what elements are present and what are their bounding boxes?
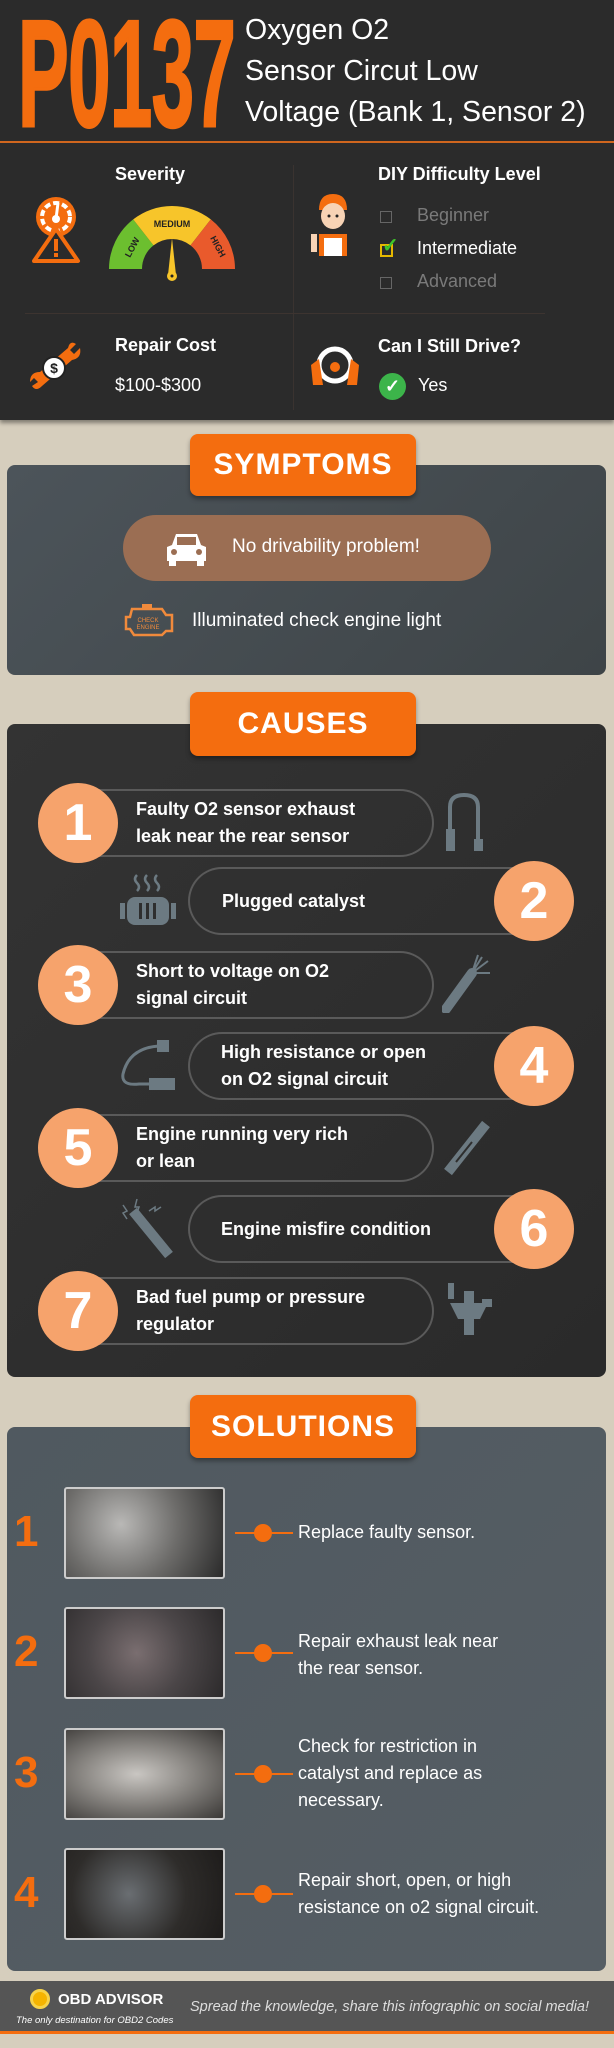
cause 1: Faulty O2 sensor exhaust bbox=[136, 799, 355, 819]
solution 1: Replace faulty sensor. bbox=[298, 1522, 475, 1542]
severity label: Severity bbox=[115, 164, 185, 184]
header panel bbox=[0, 0, 614, 420]
cause 6 bbox=[122, 1189, 574, 1269]
difficulty options: ✓ bbox=[382, 235, 399, 257]
title: Voltage (Bank 1, Sensor 2) bbox=[245, 96, 586, 128]
share text: Spread the knowledge, share this infographic on social media! bbox=[190, 1999, 589, 2015]
cause 3: Short to voltage on O2 bbox=[136, 961, 329, 981]
icon: wrench dollar bbox=[30, 342, 80, 389]
header panel: $100-$300 bbox=[115, 375, 201, 395]
symptom pill: No drivability problem! bbox=[232, 536, 420, 557]
icon: wrench dollar: $ bbox=[50, 360, 58, 376]
panel: symptoms bbox=[7, 465, 606, 675]
title: Oxygen O2 bbox=[245, 14, 389, 46]
panel: symptoms: Illuminated check engine light bbox=[192, 610, 441, 631]
heading: causes: CAUSES bbox=[237, 707, 369, 740]
cause 3: 3 bbox=[64, 956, 92, 1014]
icon: severity gauge warning bbox=[32, 197, 80, 263]
cause 5 bbox=[38, 1108, 490, 1188]
cause 7 bbox=[38, 1271, 492, 1351]
icon: yes check: ✓ bbox=[385, 376, 400, 396]
cause 4: on O2 signal circuit bbox=[221, 1069, 388, 1089]
cause 7: Bad fuel pump or pressure bbox=[136, 1287, 365, 1307]
cause 6: Engine misfire condition bbox=[221, 1219, 431, 1239]
icon: mechanic bbox=[311, 194, 347, 256]
title: Sensor Circut Low bbox=[245, 55, 478, 87]
footer bbox=[0, 1981, 614, 2034]
cause 4 bbox=[121, 1026, 574, 1106]
icon: check engine: ENGINE bbox=[136, 625, 160, 631]
gauge chart: HIGH bbox=[208, 234, 228, 259]
icon: check engine bbox=[124, 604, 174, 636]
icon: check engine: CHECK bbox=[137, 618, 159, 624]
can I still drive: Can I Still Drive? bbox=[378, 336, 521, 356]
cause 5: or lean bbox=[136, 1151, 195, 1171]
solution 3: 3 bbox=[14, 1748, 38, 1797]
gauge chart: MEDIUM bbox=[154, 219, 190, 229]
DIY label: DIY Difficulty Level bbox=[378, 164, 541, 184]
solution 3: necessary. bbox=[298, 1790, 384, 1810]
gauge chart bbox=[109, 206, 235, 281]
solution 2: 2 bbox=[14, 1627, 38, 1676]
cause 1: 1 bbox=[64, 794, 92, 852]
heading: symptoms: SYMPTOMS bbox=[213, 448, 393, 481]
solution 1: 1 bbox=[14, 1507, 38, 1556]
cause 5: Engine running very rich bbox=[136, 1124, 348, 1144]
solution 4: Repair short, open, or high bbox=[298, 1870, 511, 1890]
cause 4: 4 bbox=[520, 1037, 548, 1095]
solution 3 bbox=[14, 1728, 482, 1820]
solution 3: catalyst and replace as bbox=[298, 1763, 482, 1783]
repair cost: Repair Cost bbox=[115, 335, 216, 355]
solution 3: Check for restriction in bbox=[298, 1736, 477, 1756]
difficulty options bbox=[380, 205, 517, 291]
solution 2: the rear sensor. bbox=[298, 1658, 423, 1678]
cause 1 bbox=[38, 783, 483, 863]
cause 5: 5 bbox=[64, 1119, 92, 1177]
difficulty options: Advanced bbox=[417, 271, 497, 291]
cause 2: Plugged catalyst bbox=[222, 891, 365, 911]
title bbox=[245, 14, 586, 128]
cause 7: regulator bbox=[136, 1314, 214, 1334]
heading: solutions: SOLUTIONS bbox=[211, 1410, 395, 1443]
cause 2: 2 bbox=[520, 872, 548, 930]
solution 1 bbox=[14, 1487, 475, 1579]
symptom pill bbox=[123, 515, 491, 581]
panel: solutions bbox=[7, 1427, 606, 1971]
header panel: Yes bbox=[418, 375, 447, 395]
logo bbox=[16, 1989, 174, 2026]
cause 6: 6 bbox=[520, 1200, 548, 1258]
heading: causes bbox=[190, 692, 416, 756]
cause 7: 7 bbox=[64, 1282, 92, 1340]
cause 2 bbox=[120, 861, 574, 941]
solution 4: 4 bbox=[14, 1868, 38, 1917]
cause 3: signal circuit bbox=[136, 988, 247, 1008]
icon: car bbox=[167, 534, 206, 566]
panel: causes bbox=[7, 724, 606, 1377]
logo: OBD ADVISOR bbox=[58, 1991, 163, 2008]
logo: The only destination for OBD2 Codes bbox=[16, 2015, 173, 2026]
solution 4 bbox=[14, 1848, 539, 1940]
icon: yes check bbox=[379, 373, 406, 400]
icon: steering wheel bbox=[311, 346, 359, 385]
solution 2 bbox=[14, 1607, 498, 1699]
solution 4: resistance on o2 signal circuit. bbox=[298, 1897, 539, 1917]
difficulty options: Intermediate bbox=[417, 238, 517, 258]
heading: solutions bbox=[190, 1395, 416, 1458]
heading: symptoms bbox=[190, 434, 416, 496]
gauge chart: LOW bbox=[123, 235, 142, 259]
solution 2: Repair exhaust leak near bbox=[298, 1631, 498, 1651]
cause 1: leak near the rear sensor bbox=[136, 826, 349, 846]
cause 3 bbox=[38, 945, 490, 1025]
cause 4: High resistance or open bbox=[221, 1042, 426, 1062]
difficulty options: Beginner bbox=[417, 205, 489, 225]
